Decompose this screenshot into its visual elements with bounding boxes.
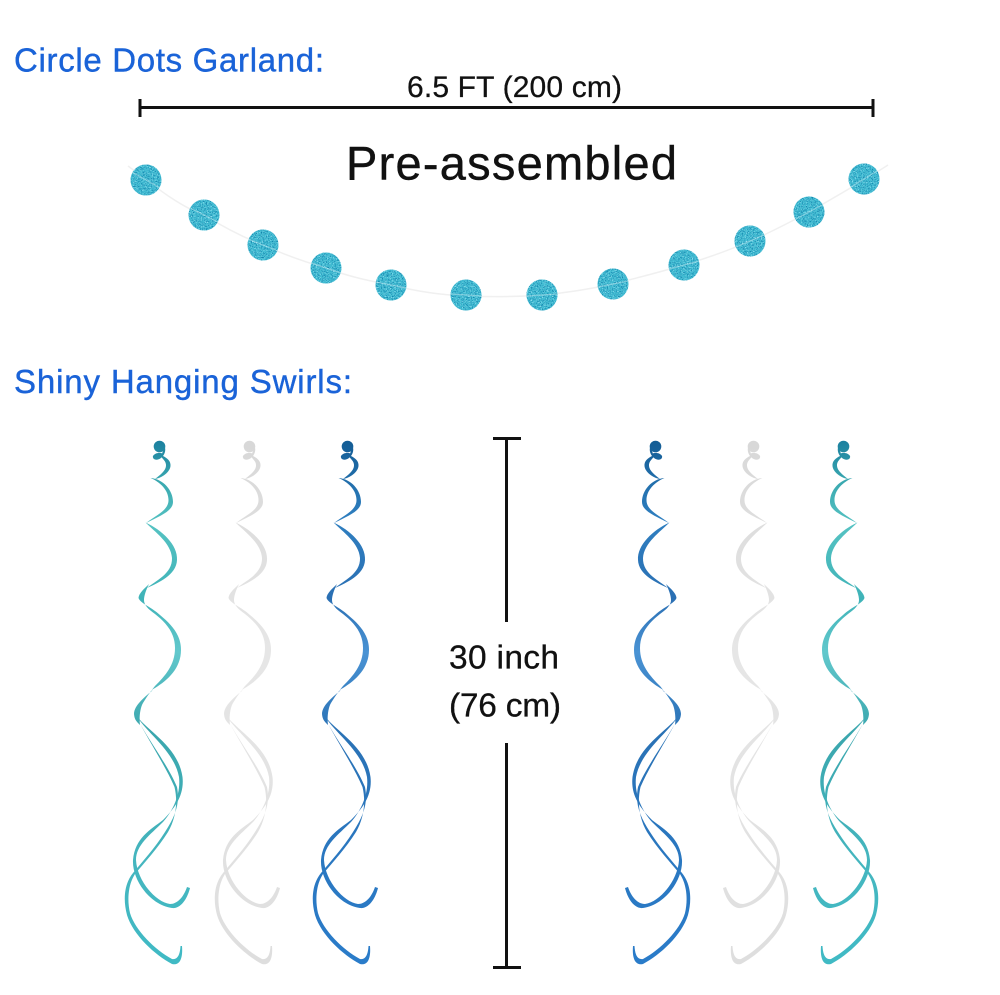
label: 30 inch: 30 inch [449, 640, 559, 676]
swirl: silver right [723, 441, 788, 964]
garland of glitter dots [128, 164, 888, 310]
label: 76 cm: (76 cm) [449, 688, 561, 724]
heading: Circle Dots Garland: Circle Dots Garland: [14, 42, 324, 78]
swirl: teal left [125, 441, 190, 964]
dimension: garland length [140, 71, 873, 117]
swirl: silver left [215, 441, 280, 964]
dimension: swirl height [449, 438, 561, 968]
heading: Shiny Hanging Swirls: Shiny Hanging Swirls: [14, 363, 352, 400]
measure bar [140, 99, 873, 117]
swirl: blue left [313, 441, 378, 964]
upper measure bar [493, 438, 521, 622]
label: 6.5 FT (200 cm): 6.5 FT (200 cm) [407, 71, 622, 104]
swirl: blue right [625, 441, 690, 964]
string highlight over dots [132, 171, 877, 296]
text: Pre-assembled: Pre-assembled [346, 136, 677, 190]
swirl: teal right [813, 441, 878, 964]
garland string [128, 165, 888, 297]
dots [130, 164, 880, 310]
lower measure bar [493, 743, 521, 968]
